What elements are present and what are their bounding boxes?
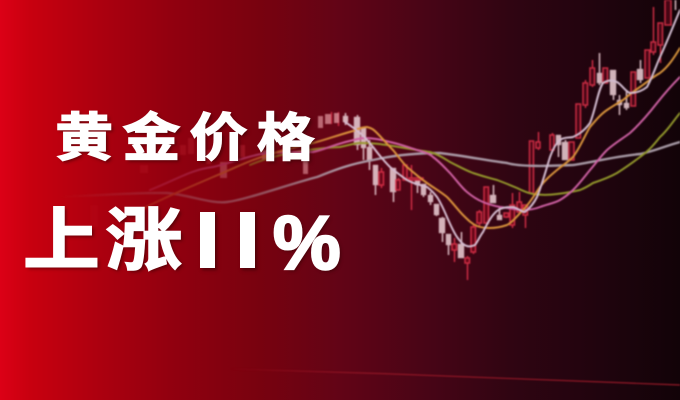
grey long-term line xyxy=(40,142,680,202)
orange line xyxy=(140,48,680,228)
title line one: 黄金价格 xyxy=(55,110,324,168)
title line two: rising: 上涨 xyxy=(23,203,188,279)
white candles xyxy=(343,0,676,258)
olive line xyxy=(250,113,680,195)
percent sign: % xyxy=(273,201,341,286)
red candles xyxy=(332,0,671,280)
pale fast line xyxy=(345,10,680,246)
pink line xyxy=(150,77,680,210)
faded candles on the left xyxy=(220,113,339,178)
moving average lines xyxy=(40,10,680,246)
red light streak xyxy=(230,369,680,385)
